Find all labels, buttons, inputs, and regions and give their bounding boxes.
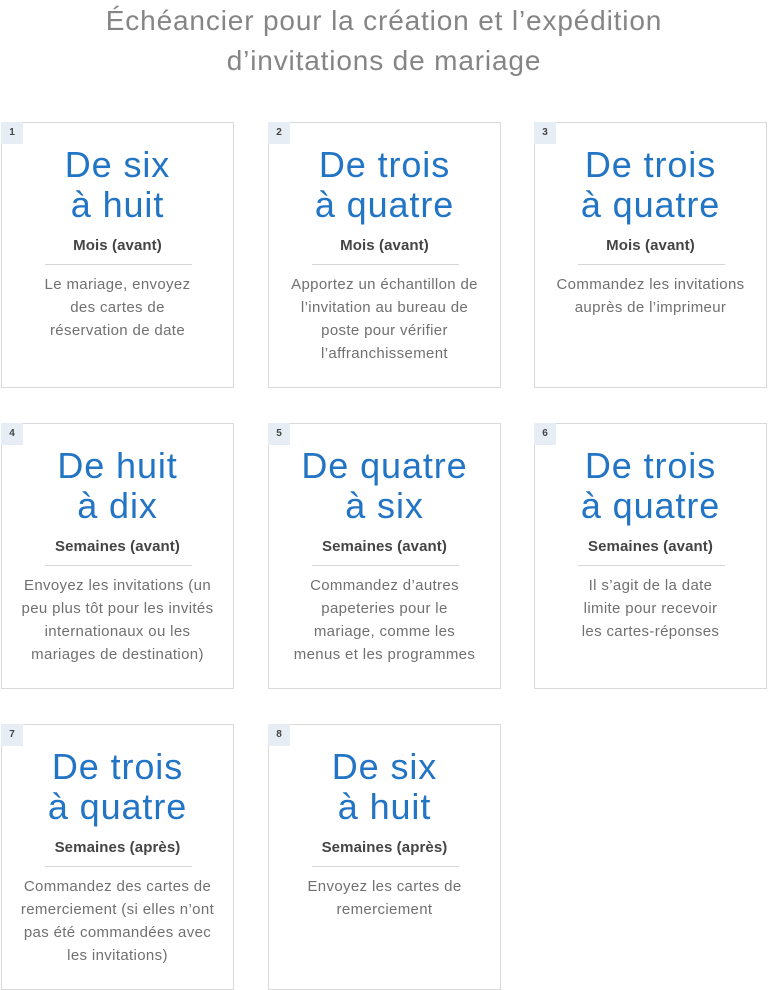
step 3 description: Commandez les invitations [556,276,744,293]
step 5 duration: De quatre [301,444,468,486]
step 4 duration: De huit [57,444,178,486]
step number 7 [1,724,23,746]
panel: step 6 [534,423,767,689]
step 6 duration [581,444,720,526]
step 6 duration: à quatre [581,485,720,526]
step 1 unit: Mois (avant) [73,236,162,254]
step 6 description: limite pour recevoir [584,600,717,617]
step number 8: 8 [276,729,282,740]
title [106,5,662,76]
step 7 duration [48,746,187,827]
title: Échéancier pour la création et l’expédition [106,5,662,36]
step 5 duration: à six [345,485,424,526]
step 1 duration [65,144,170,225]
step 7 description: Commandez des cartes de [24,878,211,895]
step 5 description: menus et les programmes [294,646,475,663]
step 8 duration: De six [332,746,437,786]
step 7 description: remerciement (si elles n’ont [21,901,214,918]
step 6 description: Il s’agit de la date [589,577,712,594]
step 4 description: mariages de destination) [31,646,204,663]
step 2 description: Apportez un échantillon de [291,276,478,293]
step 8 description: Envoyez les cartes de [307,878,462,895]
title: d’invitations de mariage [227,45,541,76]
step 7 description: pas été commandées avec [24,924,211,941]
step 5 description: mariage, comme les [314,623,455,640]
step 2 duration: à quatre [315,184,454,225]
step 8 duration [332,746,437,827]
step 2 description: l’affranchissement [321,345,448,362]
step 6 duration: De trois [585,444,716,486]
step 8 unit: Semaines (après) [322,838,447,856]
step 8 description: remerciement [337,901,432,918]
panel: step 1 [1,122,234,388]
step 3 duration: à quatre [581,184,720,225]
step 4 description [22,577,213,663]
step number 8 [268,724,290,746]
step 8 description [307,878,462,918]
step 1 description [45,276,190,339]
step number 4: 4 [9,428,15,439]
step 7 unit: Semaines (après) [55,838,180,856]
step 2 unit: Mois (avant) [340,236,429,254]
panel: step 2 [268,122,501,388]
step 1 description: réservation de date [50,322,185,339]
step 1 description: Le mariage, envoyez [45,276,190,293]
step 4 duration [57,444,178,526]
step number 5: 5 [276,428,282,439]
step number 6 [534,423,556,445]
step number 4 [1,423,23,445]
step 5 unit: Semaines (avant) [322,538,447,554]
step 2 description: poste pour vérifier [321,322,448,339]
step 3 description: auprès de l’imprimeur [575,299,726,316]
step 4 unit: Semaines (avant) [55,538,180,554]
step 4 description: peu plus tôt pour les invités [22,600,213,617]
step number 2: 2 [276,127,282,138]
step number 2 [268,122,290,144]
panel: step 8 [268,724,501,990]
step 8 duration: à huit [338,786,431,827]
step 3 duration [581,144,720,225]
step 7 description [21,878,214,964]
step 4 description: internationaux ou les [45,623,190,640]
step 6 unit: Semaines (avant) [588,538,713,554]
step 5 description: papeteries pour le [321,600,448,617]
step number 1 [1,122,23,144]
step 1 description: des cartes de [70,299,165,316]
step 3 unit: Mois (avant) [606,236,695,254]
step 5 description: Commandez d’autres [310,577,459,594]
step 2 description [291,276,478,362]
step 4 description: Envoyez les invitations (un [24,577,211,594]
step 2 duration: De trois [319,144,450,184]
step 6 description: les cartes-réponses [582,623,719,640]
step 4 duration: à dix [77,485,158,526]
step 2 duration [315,144,454,225]
step number 7: 7 [9,729,15,740]
step 7 duration: De trois [52,746,183,786]
panel: step 7 [1,724,234,990]
panel: step 4 [1,423,234,689]
step 2 description: l’invitation au bureau de [301,299,468,316]
step 1 duration: à huit [71,184,164,225]
step number 6: 6 [542,428,548,439]
step 7 description: les invitations) [67,947,168,964]
step 1 duration: De six [65,144,170,184]
step 5 duration [301,444,468,526]
step 6 description [582,577,719,640]
step 5 description [294,577,475,663]
step number 3 [534,122,556,144]
panel: step 5 [268,423,501,689]
panel: step 3 [534,122,767,388]
step number 1: 1 [9,127,15,138]
step 3 duration: De trois [585,144,716,184]
step number 3: 3 [542,127,548,138]
step 7 duration: à quatre [48,786,187,827]
step 3 description [556,276,744,316]
step number 5 [268,423,290,445]
